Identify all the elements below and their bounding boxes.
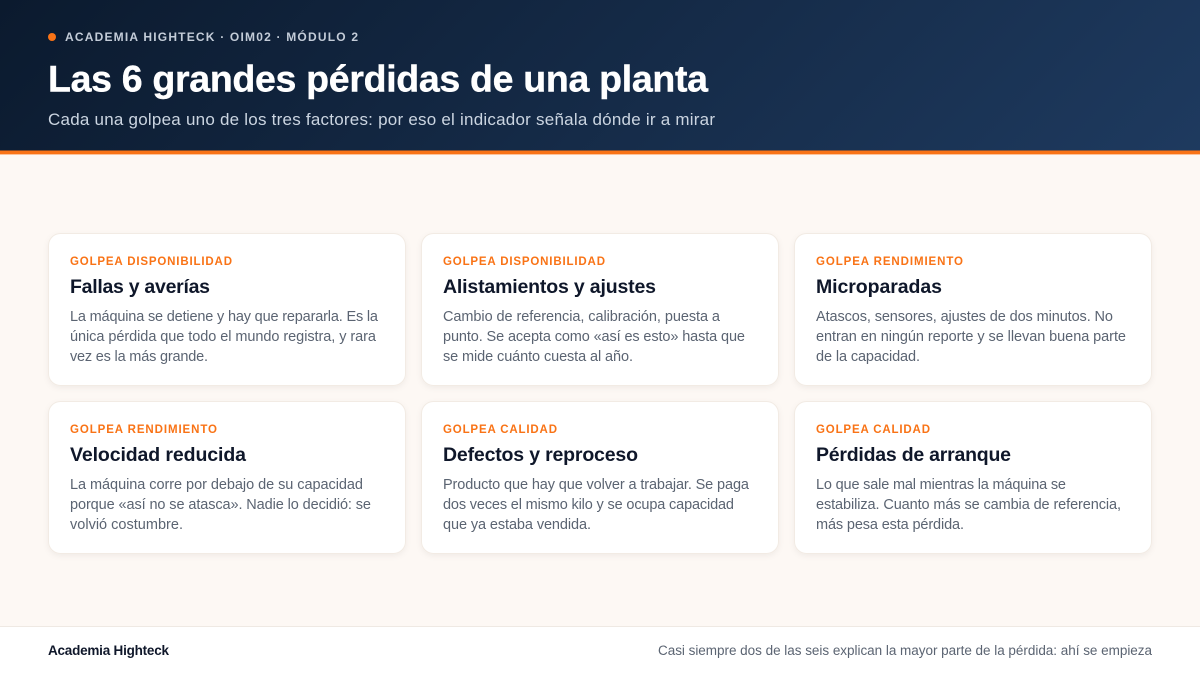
card: Fallas y averías: vez es la más grande. — [70, 349, 208, 365]
card: Pérdidas de arranque: GOLPEA CALIDAD — [816, 424, 930, 436]
card: Defectos y reproceso: que ya estaba vendida. — [443, 517, 591, 533]
card: Fallas y averías — [48, 234, 406, 386]
card: Velocidad reducida: Velocidad reducida — [70, 444, 246, 466]
card: Microparadas: de la capacidad. — [816, 349, 920, 365]
card: Alistamientos y ajustes: se mide cuánto cuesta al año. — [443, 349, 633, 365]
card: Alistamientos y ajustes — [422, 234, 778, 386]
card: Microparadas — [794, 234, 1152, 386]
card: Velocidad reducida: GOLPEA RENDIMIENTO — [70, 424, 217, 436]
card: Microparadas: GOLPEA RENDIMIENTO — [816, 256, 963, 268]
card: Pérdidas de arranque: estabiliza. Cuanto más se cambia de referencia, — [816, 497, 1121, 513]
card: Velocidad reducida: porque «así no se atasca». Nadie lo decidió: se — [70, 497, 371, 513]
header band — [0, 0, 1200, 154]
card: Fallas y averías: GOLPEA DISPONIBILIDAD — [70, 256, 232, 268]
card: Defectos y reproceso: GOLPEA CALIDAD — [443, 424, 557, 436]
card: Fallas y averías: única pérdida que todo el mundo registra, y rara — [70, 329, 377, 345]
card: Defectos y reproceso: Producto que hay que volver a trabajar. Se paga — [443, 477, 750, 493]
card: Defectos y reproceso — [422, 402, 778, 554]
footer brand: Academia Highteck — [48, 643, 169, 658]
card: Pérdidas de arranque: más pesa esta pérdida. — [816, 517, 964, 533]
card: Pérdidas de arranque — [794, 402, 1152, 554]
card: Velocidad reducida: volvió costumbre. — [70, 517, 183, 533]
card: Pérdidas de arranque: Pérdidas de arranque — [816, 444, 1011, 466]
card: Alistamientos y ajustes: Alistamientos y ajustes — [443, 276, 656, 298]
kicker: ACADEMIA HIGHTECK · OIM02 · MÓDULO 2 — [65, 29, 358, 44]
footer note: Casi siempre dos de las seis explican la mayor parte de la pérdida: ahí se empieza — [658, 643, 1152, 658]
title: Las 6 grandes pérdidas de una planta — [48, 58, 709, 100]
card: Alistamientos y ajustes: GOLPEA DISPONIBILIDAD — [443, 256, 605, 268]
card: Fallas y averías: Fallas y averías — [70, 276, 210, 298]
card: Microparadas: entran en ningún reporte y se llevan buena parte — [816, 329, 1126, 345]
card: Pérdidas de arranque: Lo que sale mal mientras la máquina se — [816, 477, 1066, 493]
card: Microparadas: Atascos, sensores, ajustes de dos minutos. No — [816, 309, 1113, 325]
card: Fallas y averías: La máquina se detiene y hay que repararla. Es la — [70, 309, 379, 325]
card: Alistamientos y ajustes: punto. Se acepta como «así es esto» hasta que — [443, 329, 745, 345]
footer — [0, 626, 1200, 675]
card: Microparadas: Microparadas — [816, 276, 942, 298]
subtitle: Cada una golpea uno de los tres factores: por eso el indicador señala dónde ir a mirar — [48, 110, 715, 129]
card: Defectos y reproceso: dos veces el mismo kilo y se ocupa capacidad — [443, 497, 734, 513]
card: Alistamientos y ajustes: Cambio de referencia, calibración, puesta a — [443, 309, 721, 325]
card: Defectos y reproceso: Defectos y reproceso — [443, 444, 638, 466]
card: Velocidad reducida: La máquina corre por debajo de su capacidad — [70, 477, 363, 493]
card: Velocidad reducida — [48, 402, 406, 554]
